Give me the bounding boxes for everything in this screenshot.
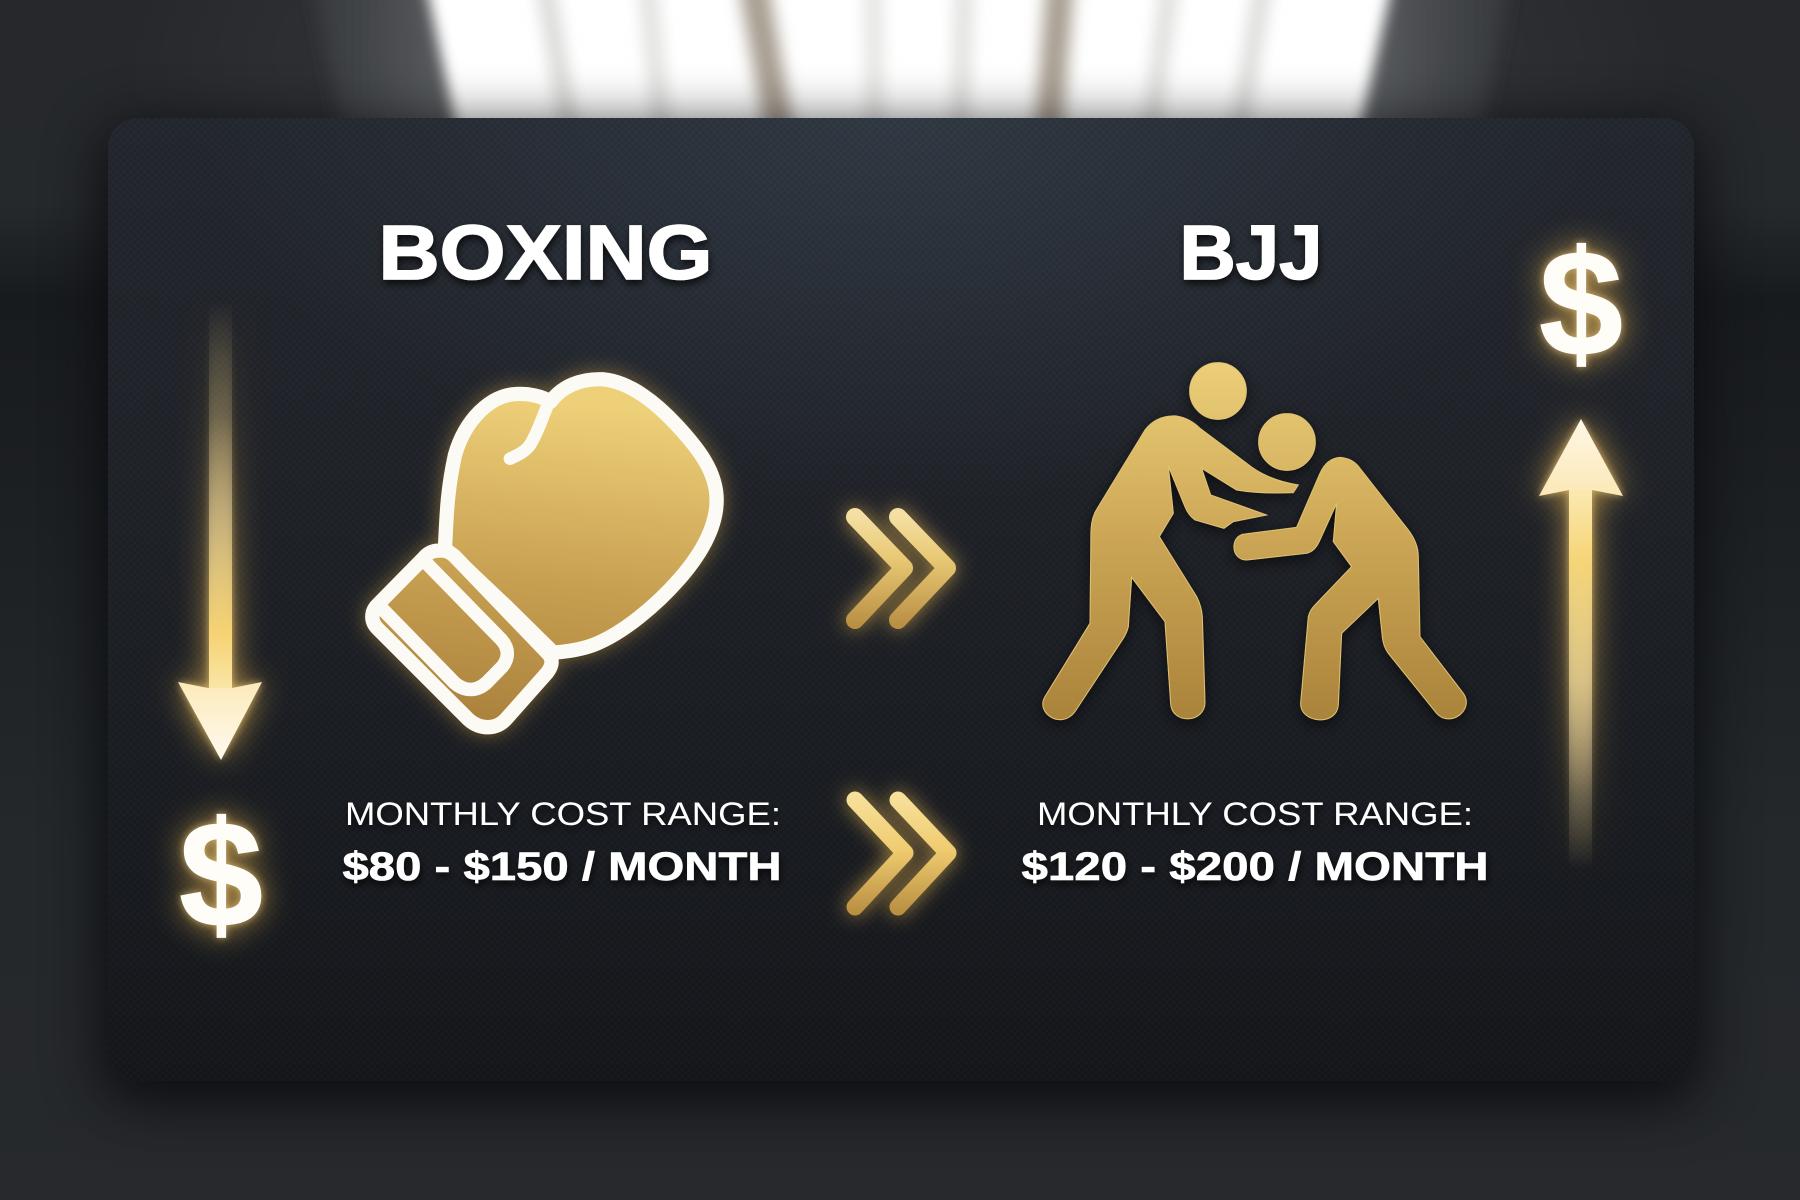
heading: bjj: BJJ bbox=[1180, 210, 1322, 296]
icon: boxing glove bbox=[372, 379, 717, 727]
text block: bjj cost bbox=[1022, 796, 1488, 889]
chevrons: upper bbox=[855, 517, 947, 620]
text block: bjj cost: MONTHLY COST RANGE: bbox=[1037, 796, 1473, 832]
card shadow bbox=[108, 118, 1694, 1081]
icon: low dollar sign: $ bbox=[179, 790, 263, 958]
text block: boxing cost: MONTHLY COST RANGE: bbox=[345, 796, 781, 832]
chevrons: lower bbox=[855, 800, 948, 907]
arrow: price down bbox=[178, 300, 262, 760]
arrow: price up bbox=[1539, 419, 1623, 870]
icon: two grappling figures bbox=[1043, 363, 1466, 720]
panel: dark comparison card bbox=[108, 118, 1694, 1081]
text block: boxing cost: $80 - $150 / MONTH bbox=[342, 845, 782, 889]
text block: bjj cost: $120 - $200 / MONTH bbox=[1022, 845, 1488, 889]
heading: boxing: BOXING bbox=[378, 210, 712, 296]
text block: boxing cost bbox=[342, 796, 782, 889]
icon: high dollar sign: $ bbox=[1539, 219, 1623, 387]
